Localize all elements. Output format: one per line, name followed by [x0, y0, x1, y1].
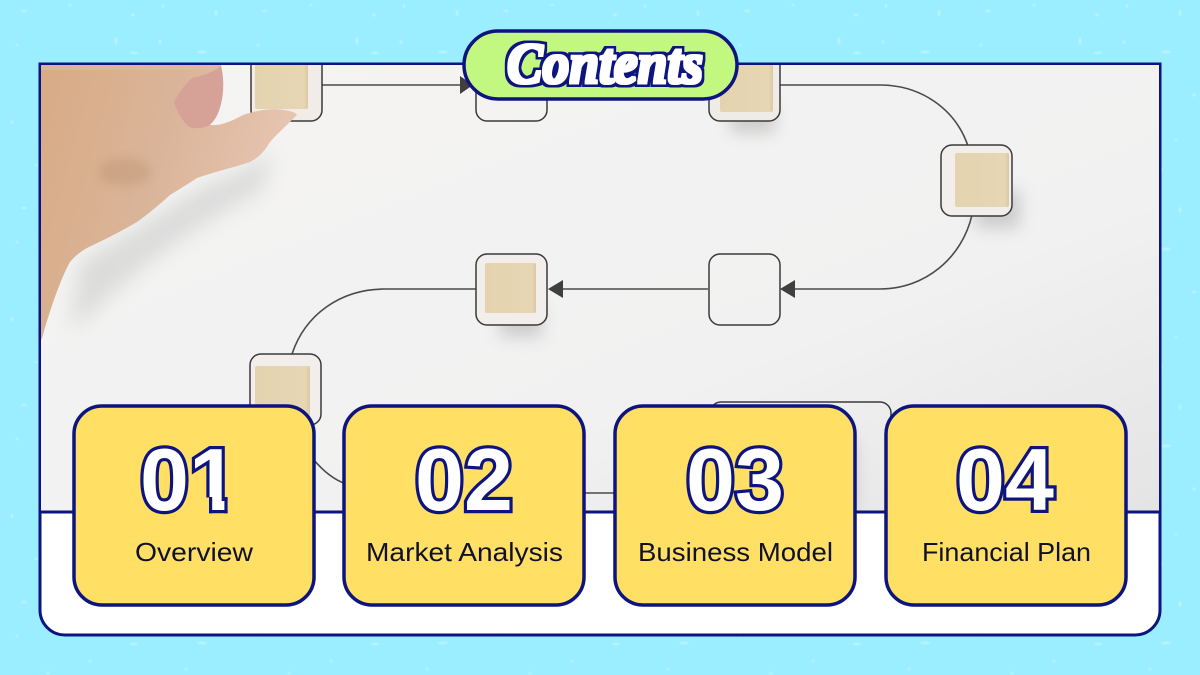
card 01: Overview: [74, 406, 314, 605]
photo: flowchart board with wooden blocks and hand: [41, 40, 1159, 522]
number 02: 02: [415, 430, 513, 529]
wooden blocks: [255, 60, 1009, 416]
card 04: Financial Plan: [886, 406, 1126, 605]
card 03: Business Model: [615, 406, 855, 605]
number 01: 01: [140, 430, 238, 529]
divider line under photo: [40, 510, 1160, 514]
label Overview: Overview: [135, 537, 253, 567]
card 02: Market Analysis: [344, 406, 584, 605]
outlined square slots: [249, 65, 1013, 425]
number 03: 03: [686, 430, 784, 529]
label Market Analysis: Market Analysis: [366, 537, 563, 567]
title: Contents: Contents: [507, 31, 703, 96]
label Business Model: Business Model: [638, 537, 833, 567]
block shadows: [500, 105, 1020, 515]
label Financial Plan: Financial Plan: [922, 537, 1091, 567]
title pill: [464, 31, 737, 99]
hand shadow: [70, 158, 269, 321]
arrowheads: [460, 76, 795, 298]
hand: [41, 65, 297, 340]
number 04: 04: [956, 430, 1054, 529]
panel: main white frame: [40, 64, 1160, 635]
flow connector lines: [292, 85, 972, 493]
